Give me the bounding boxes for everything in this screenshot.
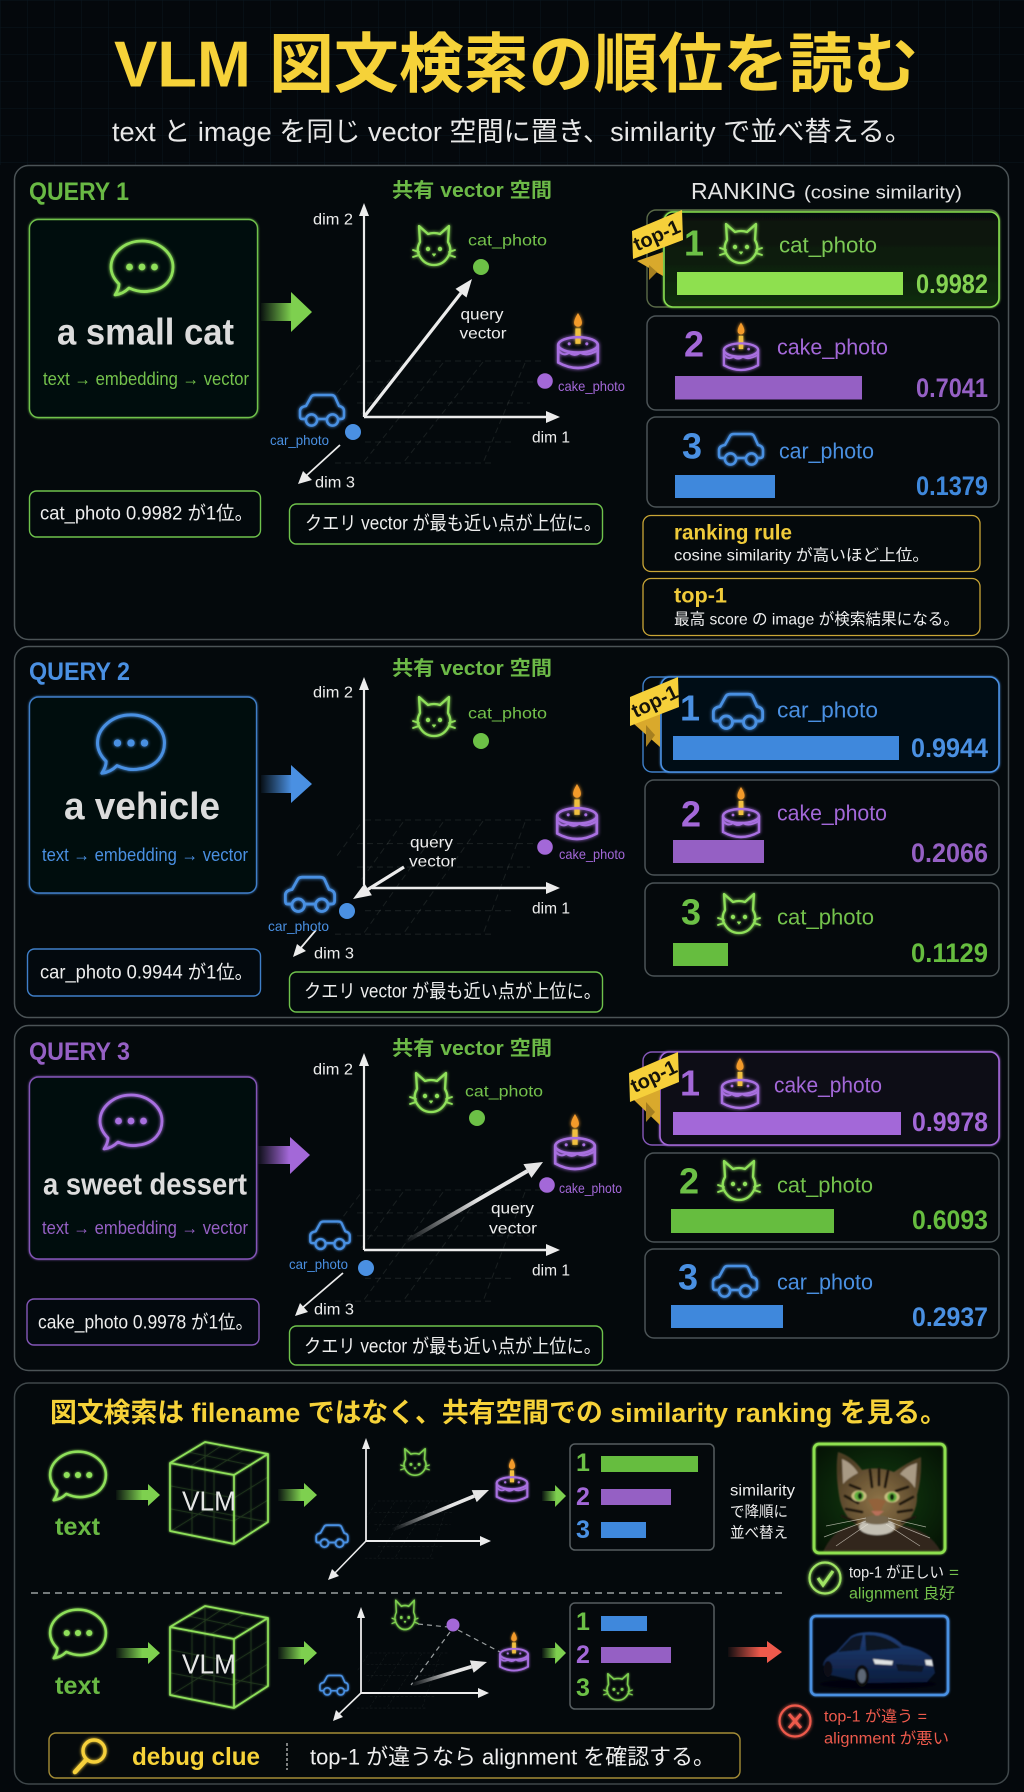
- rank card 1: 1: [684, 222, 704, 264]
- chart: ranking bars: 1: [576, 1449, 590, 1477]
- ranking heading: [691, 178, 962, 204]
- icon: cat: [413, 697, 455, 736]
- rank card 2: 2: [681, 794, 701, 834]
- text: sort note: [730, 1482, 795, 1542]
- shared vector space heading: 共有 vector 空間: [392, 179, 552, 202]
- arrow: query vector: [364, 279, 507, 417]
- chart: vector space: dim 3: [315, 474, 355, 492]
- query 1 label: QUERY 1: [29, 178, 129, 206]
- icon: cat: [413, 226, 455, 265]
- arrow: VLM to space: [278, 1483, 317, 1507]
- chart: vector space: [270, 203, 625, 492]
- rank card 3: 0.1129: [911, 938, 988, 968]
- chart: ranking bars: 3: [576, 1516, 590, 1544]
- chart: vector space: dim 3: [314, 1302, 354, 1318]
- text: alignment bad: [824, 1708, 949, 1748]
- arrow: space to ranking: [542, 1642, 566, 1664]
- icon: magnifier: [75, 1740, 105, 1772]
- chart: mini vector space: [316, 1438, 527, 1580]
- arrow: query vector: query: [410, 834, 453, 852]
- arrow: query to space: [258, 1137, 310, 1174]
- chart: vector space: car_photo: [270, 432, 329, 448]
- rank card 3: 0.1379: [916, 471, 988, 501]
- photo: car: [811, 1616, 948, 1695]
- icon: cake: [557, 784, 597, 839]
- top-1 note: 最高 score の image が検索結果になる。: [674, 610, 959, 628]
- text: alignment good: =: [949, 1564, 959, 1582]
- chart: vector space: dim 2: [313, 212, 353, 228]
- query box: [30, 697, 256, 893]
- callout: query vector rule: [290, 972, 602, 1012]
- query box: a sweet dessert: [43, 1166, 247, 1202]
- rank card 1: [643, 677, 999, 772]
- panel: summary: [14, 1383, 1008, 1784]
- icon: VLM cube: VLM: [182, 1486, 236, 1516]
- icon: speech bubble: [111, 241, 173, 295]
- arrow: query vector: vector: [409, 854, 457, 870]
- title: VLM 図文検索の順位を読む: [114, 28, 918, 100]
- text label: text: [55, 1672, 101, 1700]
- chart: vector space: dim 1: [532, 1262, 570, 1280]
- rank card 2: [645, 1153, 999, 1242]
- chart: vector space: dim 2: [313, 1062, 353, 1078]
- ranking rule note: [643, 516, 980, 572]
- top-1 ribbon: [627, 1052, 681, 1125]
- ranking rule note: cosine similarity が高いほど上位。: [674, 546, 929, 564]
- query box: [30, 220, 258, 418]
- chart: vector space: cat_photo: [468, 706, 547, 722]
- rank card 2: cake_photo: [777, 800, 887, 826]
- rank card 3: 3: [678, 1256, 698, 1298]
- arrow: VLM to space: [278, 1641, 317, 1665]
- text: sort note: similarity: [730, 1482, 795, 1500]
- shared vector space heading: 共有 vector 空間: [392, 657, 552, 680]
- text: alignment bad: top-1 が違う =: [824, 1708, 927, 1726]
- text: alignment good: alignment 良好: [849, 1584, 955, 1602]
- rank card 2: 0.7041: [916, 373, 988, 403]
- chart: vector space: car_photo: [268, 918, 329, 934]
- icon: VLM cube: VLM: [182, 1648, 236, 1680]
- chart: ranking bars: 1: [576, 1608, 590, 1636]
- arrow: query to space: [261, 765, 312, 803]
- icon: cat: [410, 1073, 452, 1112]
- text: sort note: で降順に: [730, 1504, 788, 1520]
- rank card 1: 0.9982: [916, 269, 988, 299]
- chart: vector space: [268, 677, 625, 962]
- arrow: query vector: [405, 1162, 543, 1242]
- summary heading: 図文検索は filename ではなく、共有空間での similarity ranking を見る。: [50, 1398, 947, 1428]
- icon: cat: [392, 1600, 418, 1630]
- rank card 1: 0.9978: [912, 1107, 988, 1137]
- rank card 3: car_photo: [779, 438, 874, 464]
- icon: cake: [497, 1458, 527, 1501]
- icon: cat: [401, 1449, 429, 1475]
- top-1 ribbon: [630, 210, 684, 280]
- text: alignment good: [849, 1564, 959, 1602]
- rank card 1: cat_photo: [779, 232, 877, 258]
- rank card 3: car_photo: [777, 1270, 873, 1294]
- rank card 3: [645, 1249, 999, 1338]
- subtitle: text と image を同じ vector 空間に置き、similarity で並べ替える。: [112, 117, 912, 147]
- flow: wrong alignment: [50, 1600, 949, 1748]
- text: alignment bad: alignment が悪い: [824, 1730, 949, 1748]
- top-1 note: top-1: [674, 584, 727, 608]
- icon: VLM cube: [170, 1606, 268, 1708]
- icon: speech bubble: [100, 1095, 162, 1149]
- query box: a vehicle: [64, 786, 220, 828]
- top-1 ribbon: top-1: [628, 681, 682, 723]
- rank card 1: car_photo: [777, 698, 878, 722]
- callout: result: [30, 491, 260, 537]
- icon: cake: [500, 1632, 528, 1671]
- chart: ranking bars: 3: [576, 1674, 590, 1702]
- rank card 3: 3: [682, 426, 702, 466]
- chart: vector space: cake_photo: [559, 1180, 622, 1196]
- icon: speech bubble: [50, 1610, 106, 1658]
- chart: vector space: cake_photo: [559, 846, 625, 862]
- callout: query vector rule: クエリ vector が最も近い点が上位に。: [304, 980, 601, 1002]
- panel: query 1: [14, 166, 1008, 640]
- rank card 1: 1: [680, 1062, 700, 1104]
- chart: vector space: cat_photo: [465, 1084, 543, 1100]
- debug clue bar: debug clue: [132, 1743, 260, 1771]
- rank card 2: 2: [684, 324, 704, 364]
- arrow: space to ranking: [542, 1485, 566, 1507]
- query box: [30, 1077, 256, 1259]
- query 2 label: QUERY 2: [29, 658, 130, 686]
- chart: vector space: car_photo: [289, 1256, 348, 1272]
- panel: query 3: [14, 1026, 1008, 1370]
- chart: ranking bars: [570, 1444, 714, 1550]
- callout: query vector rule: [290, 504, 602, 544]
- chart: vector space: cake_photo: [558, 378, 625, 394]
- callout: query vector rule: クエリ vector が最も近い点が上位に。: [304, 1336, 601, 1358]
- callout: result: [27, 1299, 259, 1345]
- chart: ranking bars: [570, 1603, 714, 1709]
- arrow: query vector: query: [491, 1200, 534, 1218]
- icon: car: [285, 877, 335, 911]
- icon: car: [310, 1222, 350, 1249]
- rank card 3: cat_photo: [777, 904, 874, 930]
- rank card 2: 0.6093: [912, 1205, 988, 1235]
- icon: VLM cube: [170, 1442, 268, 1544]
- arrow: query vector: vector: [460, 326, 507, 342]
- chart: vector space: dim 1: [532, 900, 570, 918]
- rank card 2: cake_photo: [777, 334, 888, 360]
- shared vector space heading: 共有 vector 空間: [392, 1037, 552, 1060]
- photo: cat: [814, 1444, 945, 1553]
- arrow: query vector: [392, 1490, 489, 1530]
- rank card 2: [647, 316, 999, 410]
- chart: vector space: cat_photo: [468, 232, 547, 250]
- query box: text → embedding → vector: [42, 1218, 248, 1238]
- icon: car: [300, 395, 344, 426]
- chart: vector space: [289, 1053, 622, 1318]
- rank card 2: [645, 780, 999, 875]
- rank card 3: 0.2937: [912, 1302, 988, 1332]
- icon: cross: [780, 1706, 810, 1736]
- arrow: text to VLM: [116, 1642, 160, 1664]
- callout: query vector rule: [290, 1326, 602, 1365]
- chart: vector space: dim 1: [532, 430, 570, 446]
- icon: check: [810, 1562, 840, 1594]
- rank card 3: 3: [681, 892, 701, 932]
- callout: result: car_photo 0.9944 が1位。: [40, 962, 253, 984]
- rank card 3: [647, 417, 999, 507]
- arrow: query vector: [411, 1660, 487, 1685]
- rank card 2: cat_photo: [777, 1172, 873, 1198]
- query box: text → embedding → vector: [42, 845, 248, 865]
- arrow: query to space: [261, 292, 312, 332]
- debug clue bar: top-1 が違うなら alignment を確認する。: [310, 1744, 715, 1770]
- text: alignment good: top-1 が正しい: [849, 1564, 944, 1582]
- rank card 2: 2: [679, 1160, 699, 1202]
- arrow: text to VLM: [116, 1484, 160, 1506]
- ranking heading: (cosine similarity): [804, 182, 962, 202]
- icon: speech bubble: [50, 1452, 106, 1500]
- query box: text → embedding → vector: [43, 369, 249, 389]
- top-1 note: [643, 578, 980, 636]
- rank card 1: 0.9944: [911, 733, 988, 763]
- callout: result: cake_photo 0.9978 が1位。: [38, 1312, 253, 1334]
- flow: correct alignment: [50, 1438, 959, 1602]
- callout: result: cat_photo 0.9982 が1位。: [40, 502, 253, 524]
- rank card 1: [643, 1052, 999, 1145]
- rank card 2: 0.2066: [911, 838, 988, 868]
- rank card 1: [647, 210, 999, 307]
- arrow: query vector: query: [460, 306, 504, 324]
- top-1 ribbon: top-1: [630, 216, 684, 256]
- debug clue bar: [49, 1733, 740, 1778]
- icon: car: [320, 1675, 348, 1695]
- chart: mini vector space: [320, 1600, 528, 1721]
- top-1 ribbon: [628, 677, 682, 747]
- chart: vector space: dim 3: [314, 946, 354, 962]
- dashed guides: [411, 1624, 500, 1685]
- query 3 label: QUERY 3: [29, 1038, 130, 1066]
- rank card 1: 1: [680, 688, 700, 728]
- icon: speech bubble: [98, 715, 164, 773]
- ranking heading: RANKING: [691, 178, 796, 204]
- icon: cake: [555, 1114, 595, 1169]
- panel: query 2: [14, 646, 1008, 1018]
- arrow: query vector: vector: [489, 1220, 538, 1238]
- top-1 ribbon: top-1: [627, 1056, 681, 1098]
- ranking rule note: ranking rule: [674, 522, 792, 544]
- icon: car: [316, 1525, 348, 1547]
- rank card 1: cake_photo: [774, 1072, 882, 1098]
- chart: ranking bars: 2: [576, 1483, 590, 1511]
- text: sort note: 並べ替え: [730, 1524, 788, 1542]
- callout: query vector rule: クエリ vector が最も近い点が上位に。: [305, 512, 601, 534]
- query box: a small cat: [57, 312, 234, 352]
- icon: cake: [558, 313, 598, 368]
- arrow: wrong result: [728, 1641, 782, 1663]
- rank card 3: [645, 883, 999, 976]
- arrow: query vector: [353, 834, 457, 899]
- callout: result: [28, 949, 260, 996]
- text label: text: [55, 1513, 101, 1541]
- chart: vector space: dim 2: [313, 684, 353, 702]
- chart: ranking bars: 2: [576, 1641, 590, 1669]
